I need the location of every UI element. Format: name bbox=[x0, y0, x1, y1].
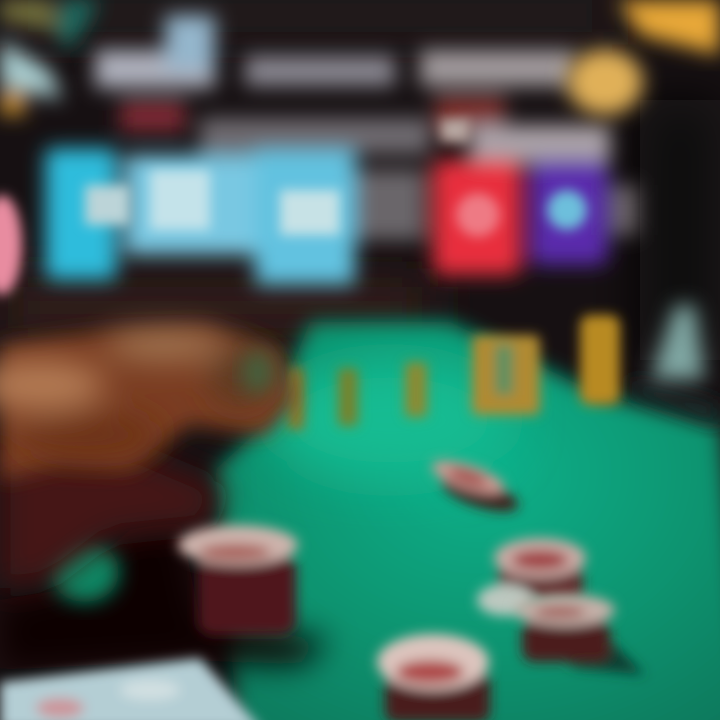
icon: yellow lamp top right bbox=[618, 0, 720, 55]
icon: chip front centre bbox=[377, 634, 490, 720]
tile: light blue bbox=[125, 155, 255, 255]
panel: table highlight bbox=[270, 360, 510, 480]
tile: sky blue bbox=[255, 150, 355, 285]
tile: purple bbox=[530, 160, 608, 265]
panel: table edge right bbox=[630, 380, 720, 425]
tile: cyan bbox=[45, 148, 117, 280]
heading: top white band bbox=[95, 15, 575, 88]
panel: screen details bbox=[85, 118, 587, 237]
shape: black foreground shadow bbox=[0, 520, 330, 670]
icon: card bottom left bbox=[0, 658, 262, 720]
icon: chip stack right bbox=[477, 538, 586, 616]
icon: yellow glow blob bbox=[567, 49, 643, 115]
panel: green gap at lower left bbox=[51, 542, 119, 602]
heading: middle band bbox=[120, 95, 610, 163]
shape: forearm bbox=[0, 325, 295, 480]
tile: grey bbox=[355, 170, 425, 240]
icon: gold glasses row bbox=[288, 315, 620, 430]
shape: hand highlight bbox=[0, 331, 270, 457]
icon: grey glass right bbox=[650, 305, 705, 380]
background: upper wall bbox=[0, 0, 720, 360]
tile: red bbox=[433, 160, 521, 275]
icon: top left sign bbox=[0, 0, 100, 115]
icon: pink sign left bbox=[0, 195, 22, 295]
shape: dark arm base bbox=[0, 450, 225, 590]
icon: chip stack lower right bbox=[515, 594, 645, 675]
illustration: hand bbox=[0, 325, 295, 590]
panel: green table felt bbox=[215, 322, 720, 720]
panel: screen banner bbox=[45, 15, 638, 285]
icon: chip stack front left bbox=[178, 525, 298, 635]
icon: chip centre bbox=[428, 454, 522, 519]
icon: chip held in hand bbox=[242, 350, 274, 394]
tile: pale right bbox=[610, 185, 638, 235]
